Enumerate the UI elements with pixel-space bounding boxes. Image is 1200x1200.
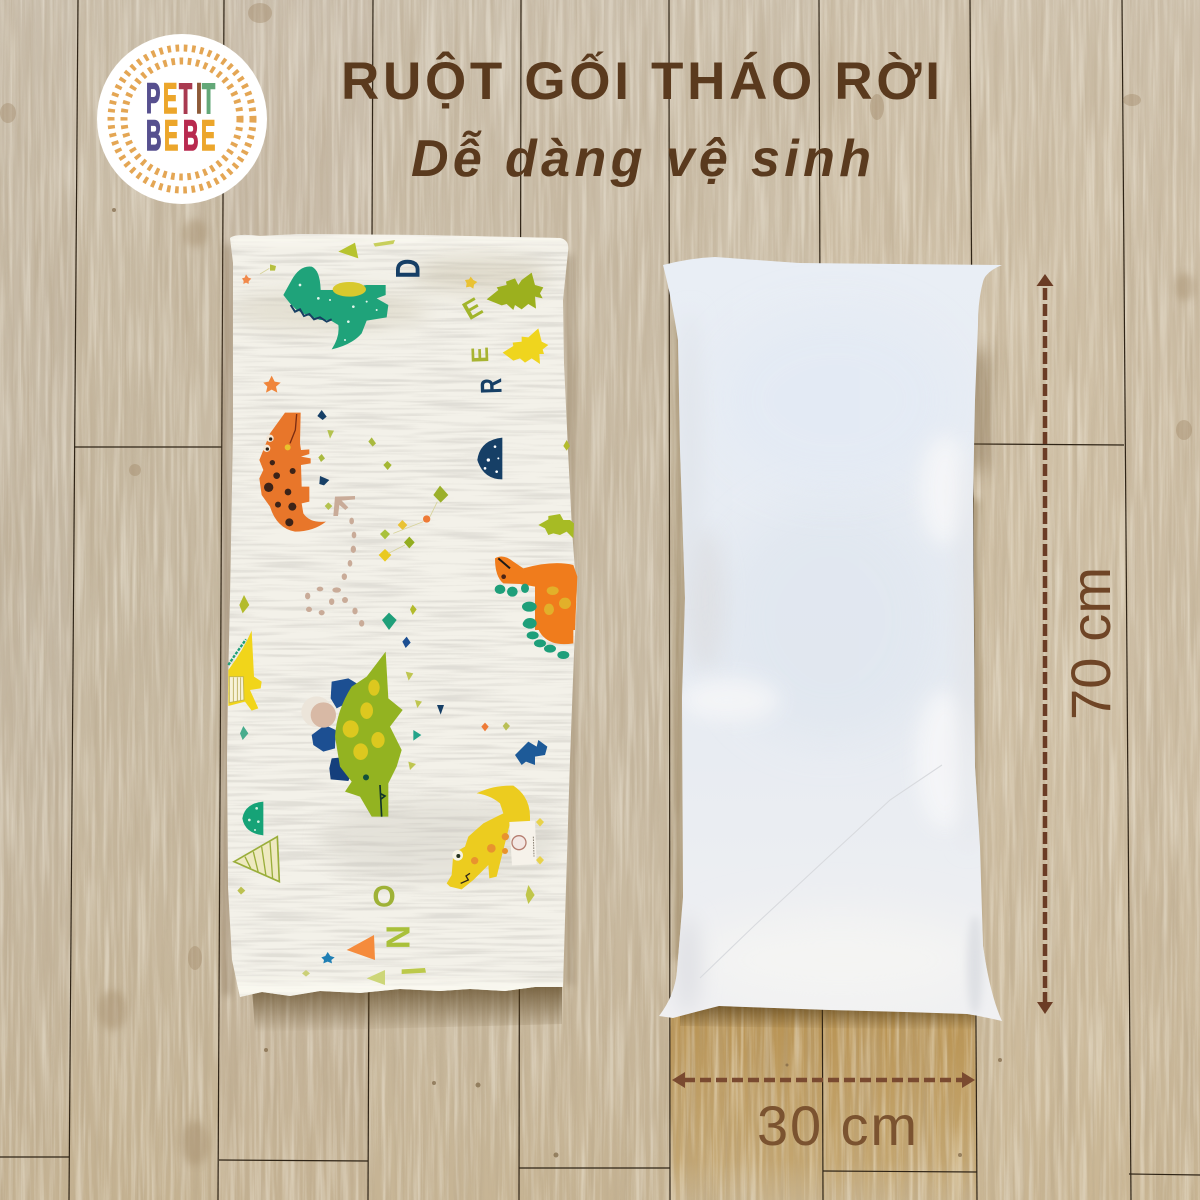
icon: teal crocodile bbox=[283, 266, 388, 349]
icon: blue star bbox=[321, 952, 335, 963]
letter R: R bbox=[474, 377, 509, 394]
fabric base bbox=[220, 230, 585, 1000]
icon: orange triangle bbox=[347, 935, 375, 960]
title: RUỘT GỐI THÁO RỜI bbox=[341, 50, 940, 111]
icon: orange crocodile bbox=[259, 413, 326, 532]
icon: green stegosaurus bbox=[301, 652, 403, 817]
letter E olive rotated: E bbox=[457, 291, 487, 326]
icon: blue tree bbox=[515, 740, 547, 765]
icon: orange dinosaur bbox=[495, 556, 577, 630]
logo wordmark BEBE: B bbox=[183, 112, 199, 160]
dotted footprint trail bbox=[305, 496, 364, 627]
icon: orange dinosaur tail bbox=[523, 620, 573, 659]
upper half print bbox=[239, 240, 577, 630]
logo wordmark BEBE: B bbox=[146, 112, 162, 160]
vertical arrow: 70 cm height bbox=[1036, 274, 1054, 1014]
small print marks bbox=[237, 637, 544, 985]
icon: teal half dome bbox=[242, 802, 263, 835]
pillowcase shadow bbox=[223, 245, 574, 1032]
logo wordmark BEBE: E bbox=[201, 112, 215, 160]
pillow shadow bbox=[674, 320, 988, 1030]
icon: striped triangle bbox=[234, 837, 279, 882]
logo wordmark PETIT: P bbox=[146, 75, 160, 123]
letter N rotated: N bbox=[379, 925, 416, 949]
outer dash ring bbox=[111, 48, 253, 190]
lower half print bbox=[228, 620, 573, 985]
panel: dinosaur muslin pillowcase bbox=[220, 230, 585, 1000]
icon: olive trees bbox=[487, 273, 543, 310]
icon: yellow dinosaur bbox=[228, 631, 262, 711]
logo wordmark PETIT: I bbox=[196, 75, 202, 123]
horizontal arrow: 30 cm width bbox=[672, 1072, 975, 1088]
sewn label bbox=[509, 821, 537, 865]
icon: yellow tree bbox=[503, 328, 548, 364]
inner dash ring bbox=[124, 61, 240, 177]
letter E second: E bbox=[467, 346, 494, 363]
subtitle: Dễ dàng vệ sinh bbox=[411, 130, 871, 188]
logo wordmark BEBE: E bbox=[164, 112, 178, 160]
panel: white pillow insert bbox=[650, 250, 1010, 1030]
label: 30 cm: 30 cm bbox=[757, 1094, 917, 1157]
constellation lines bbox=[260, 268, 437, 553]
logo wordmark PETIT: T bbox=[202, 75, 215, 123]
logo badge bbox=[97, 34, 267, 204]
label: 70 cm: 70 cm bbox=[1059, 567, 1122, 720]
logo wordmark PETIT: E bbox=[163, 75, 177, 123]
small stars and triangles bbox=[239, 240, 570, 630]
icon: navy half dome bbox=[477, 438, 502, 479]
letter D: D bbox=[388, 259, 427, 279]
icon: yellow crocodile bbox=[447, 786, 530, 889]
icon: olive tree right bbox=[538, 514, 574, 538]
logo wordmark PETIT: T bbox=[179, 75, 192, 123]
pillow seam bbox=[700, 765, 942, 978]
letter O: O bbox=[372, 880, 396, 913]
